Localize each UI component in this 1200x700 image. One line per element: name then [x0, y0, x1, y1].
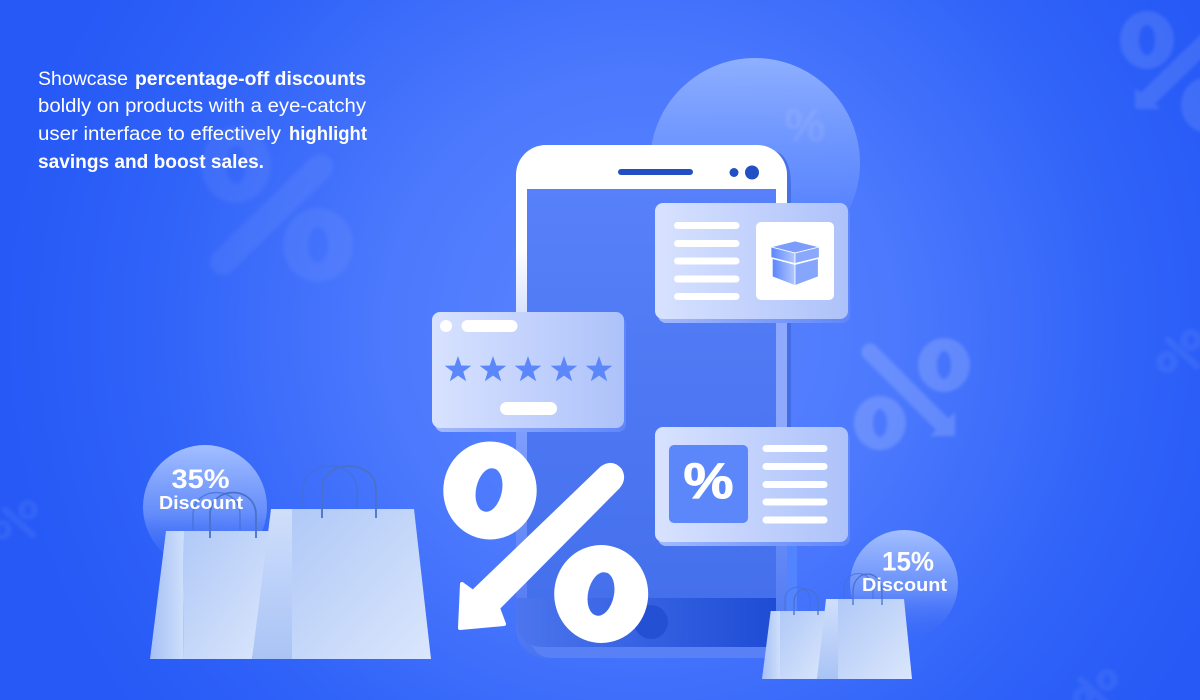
- bag one fold: [150, 531, 184, 659]
- decorative circle behind phone: [650, 58, 860, 268]
- phone: [516, 145, 797, 658]
- bag one front: [183, 531, 272, 659]
- discount card: [655, 427, 850, 546]
- phone bottom edge: [530, 632, 787, 658]
- background percent: left edge: [0, 500, 38, 540]
- back handles: [193, 466, 357, 530]
- 35% discount badge circle: [143, 445, 267, 569]
- right frame segment: [776, 319, 787, 429]
- title pill: [462, 320, 518, 332]
- intro text block: savings and boost sales.: [38, 152, 264, 173]
- product tile: [756, 222, 834, 300]
- text lines: [762, 445, 828, 524]
- home button: [634, 605, 668, 639]
- phone chin: [516, 598, 776, 647]
- intro text block: highlight: [289, 124, 368, 145]
- button pill: [500, 402, 557, 415]
- text lines: [674, 222, 740, 300]
- large percent icon with arrow: [443, 441, 648, 643]
- intro text block: [38, 69, 368, 173]
- bag one front: [780, 611, 828, 679]
- product card: [655, 203, 850, 323]
- large shopping bags: [150, 466, 431, 659]
- avatar dot: [440, 320, 452, 332]
- ghost percent in circle: %: [785, 99, 825, 151]
- speaker: [618, 169, 693, 175]
- phone side shadow: [760, 150, 791, 430]
- intro text block: user interface to effectively: [38, 124, 282, 145]
- camera: [745, 166, 759, 180]
- background percent: top left: [201, 127, 353, 282]
- 15% discount label: Discount: [862, 575, 947, 595]
- intro text block: percentage-off discounts: [135, 69, 366, 90]
- bag two front: [292, 509, 431, 659]
- back handles: [785, 574, 873, 611]
- phone screen: [527, 189, 776, 598]
- front handles: [794, 574, 882, 615]
- 35% discount label: Discount: [159, 493, 243, 513]
- intro text block: boldly on products with a eye-catchy: [38, 96, 367, 117]
- 35% discount label: [159, 464, 243, 513]
- phone body: [516, 145, 787, 658]
- icon: box: [771, 241, 819, 286]
- bag one fold: [762, 611, 780, 679]
- five stars: [445, 356, 612, 381]
- background percent: right edge: [1156, 329, 1200, 373]
- front sensor: [730, 168, 738, 177]
- bag two fold: [817, 599, 838, 679]
- bag two fold: [252, 509, 292, 659]
- background percent: bottom edge: [1072, 669, 1118, 700]
- rating card: [432, 312, 626, 432]
- front handles: [210, 466, 376, 538]
- bag two front: [838, 599, 912, 679]
- percent tile: [669, 445, 748, 523]
- background percent: centre right with arrow: [854, 338, 970, 450]
- 35% discount label: 35%: [172, 464, 230, 494]
- background percent: top right with arrow: [1120, 11, 1200, 133]
- percent sign: %: [684, 453, 734, 509]
- intro text block: Showcase: [38, 69, 128, 90]
- 15% discount label: [862, 546, 947, 595]
- 15% discount label: 15%: [882, 546, 934, 576]
- 15% discount badge circle: [850, 530, 958, 638]
- small shopping bags: [762, 574, 912, 679]
